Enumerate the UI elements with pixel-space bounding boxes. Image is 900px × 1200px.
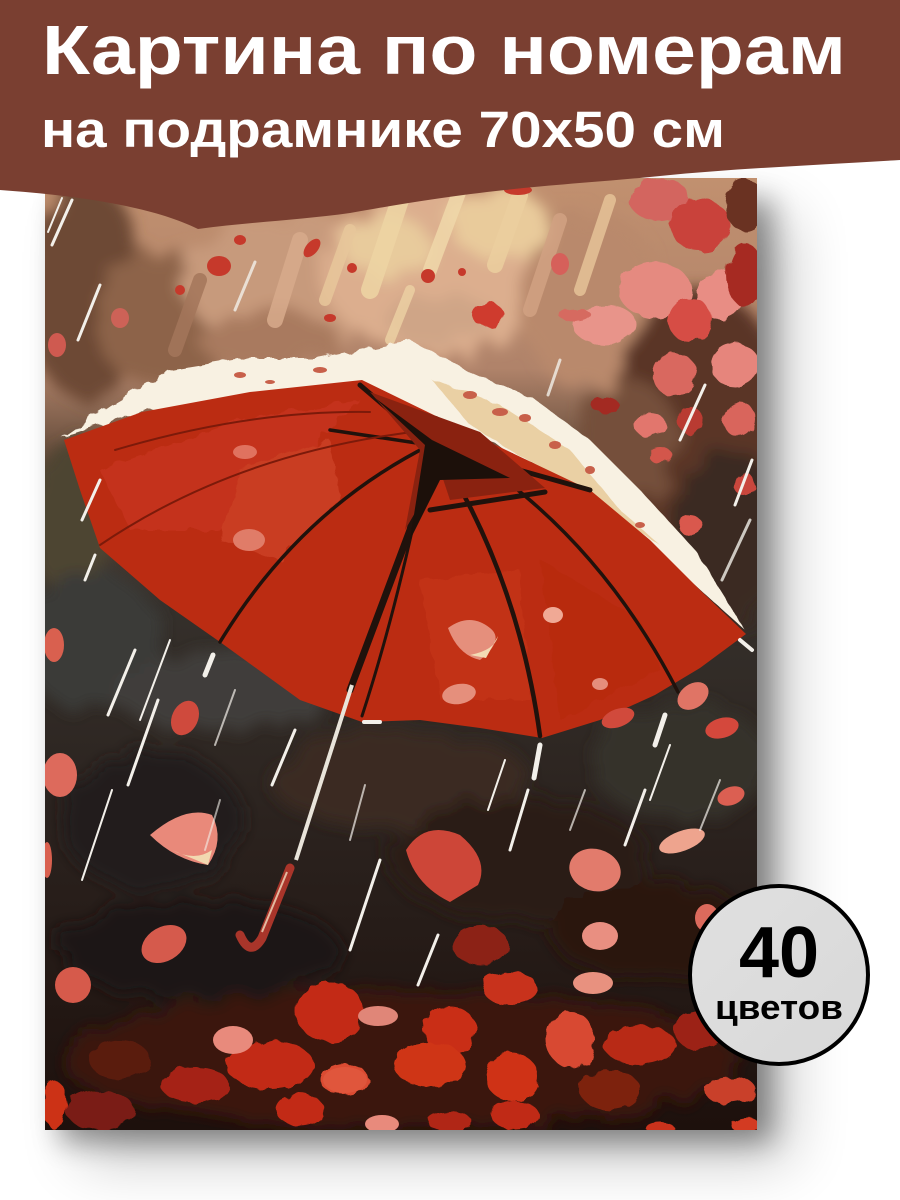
canvas drop shadow — [60, 200, 790, 1160]
petals on canopy — [233, 445, 741, 742]
rain streaks — [48, 198, 752, 985]
snow speckles — [234, 367, 645, 528]
flowers top right — [472, 178, 765, 535]
umbrella shaft — [296, 685, 352, 860]
red flower bed — [43, 925, 759, 1134]
top banner — [0, 0, 900, 229]
umbrella red canopy — [64, 380, 746, 738]
brush strokes in the sky — [175, 190, 610, 350]
falling petals — [42, 628, 747, 1003]
painting: red umbrella in the rain — [20, 178, 790, 1134]
badge: 40 colours — [690, 886, 868, 1064]
umbrella dark hub wedge — [370, 392, 545, 530]
umbrella snowy top edge — [62, 340, 745, 630]
umbrella lighter panels — [100, 400, 360, 562]
painted background patches — [20, 180, 790, 1130]
title: Картина по номерам — [42, 11, 846, 89]
pale petals on flower bed — [213, 1006, 399, 1133]
umbrella handle — [240, 868, 290, 947]
umbrella ribs — [100, 385, 678, 736]
umbrella — [62, 340, 746, 947]
badge number: 40 — [739, 913, 819, 993]
floating top petals — [48, 185, 569, 357]
badge label: цветов — [715, 989, 843, 1027]
subtitle: на подрамнике 70х50 см — [41, 101, 725, 158]
